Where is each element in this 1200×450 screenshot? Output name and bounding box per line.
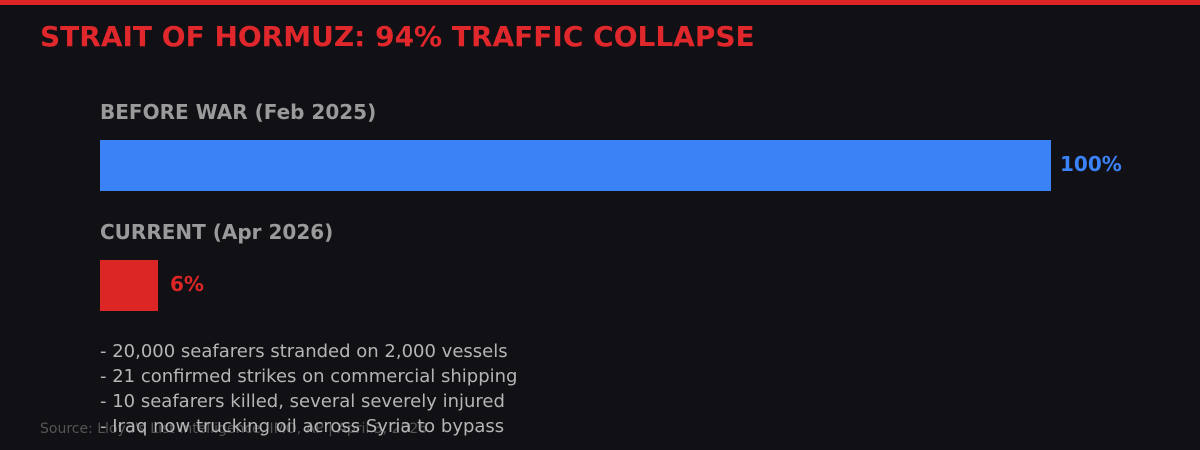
bullet list: impacts: - 21 confirmed strikes on commercial shipping [100, 366, 517, 387]
value: 100%: 100% [1060, 152, 1122, 176]
bullet list: impacts: - Iraq now trucking oil across Syria to bypass [100, 416, 504, 437]
source note: Source: Lloyd's List Intelligence, IMO, AP | April 3, 2026 [40, 421, 427, 437]
bullet list: impacts: - 20,000 seafarers stranded on 2,000 vessels [100, 341, 508, 362]
bar: before war 100% [100, 140, 1051, 191]
label: current: CURRENT (Apr 2026) [100, 220, 333, 244]
title: STRAIT OF HORMUZ: 94% TRAFFIC COLLAPSE [40, 20, 755, 53]
top accent bar [0, 0, 1200, 5]
label: before war: BEFORE WAR (Feb 2025) [100, 100, 376, 124]
bar: current 6% [100, 260, 158, 311]
value: 6%: 6% [170, 272, 204, 296]
bullet list: impacts [100, 341, 517, 437]
bullet list: impacts: - 10 seafarers killed, several severely injured [100, 391, 505, 412]
